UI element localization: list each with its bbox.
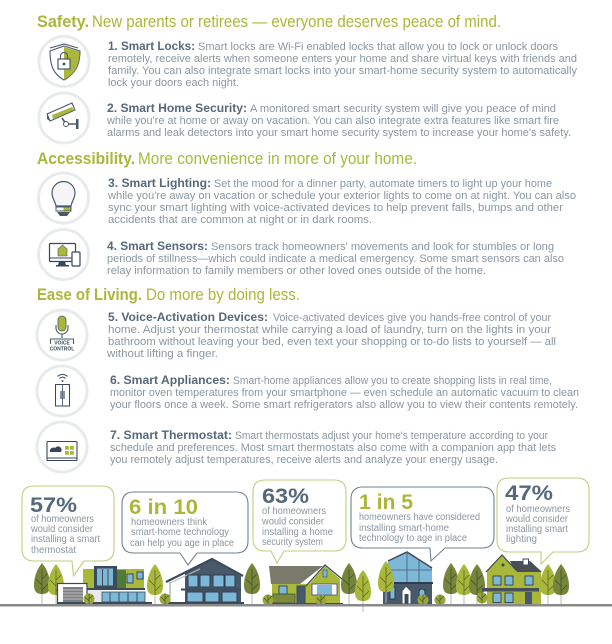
heading: Safety: New parents or retirees — everyone deserves peace of mind.	[92, 12, 501, 31]
text: smart home security	[106, 103, 571, 139]
trees	[34, 563, 569, 612]
heading: Accessibility	[37, 149, 417, 168]
text: smart thermostat: schedule and preferences. Most smart thermostats also come with a companion app that lets	[110, 442, 556, 454]
text: voice-activation devices: bathroom without leaving your bed, even text your shopping or to-do lists to yourself — all	[108, 336, 556, 348]
house 5: olive two-storey	[482, 555, 542, 604]
text: smart sensors: Sensors track homeowners' movements and look for stumbles or long	[211, 241, 554, 253]
text: smart locks: 1. Smart Locks:	[108, 41, 195, 53]
icon: smart sensors devices	[38, 230, 88, 280]
icon: voice control microphone: VOICE	[54, 340, 70, 346]
text: smart home security: alarms and leak detectors into your smart home security system to increase your home's safety.	[107, 127, 571, 139]
icon: smart refrigerator	[37, 366, 87, 416]
text: voice-activation devices: 5. Voice-Activation Devices:	[108, 312, 268, 324]
icon: voice control microphone	[37, 310, 87, 360]
callout: 1 in 5: installing smart-home	[359, 523, 449, 534]
heading: Ease of Living: Ease of Living.	[37, 285, 142, 304]
callout: 47%: 47%	[505, 481, 553, 505]
callout: 63%: 63%	[262, 484, 309, 508]
text: smart thermostat: 7. Smart Thermostat:	[110, 430, 232, 442]
house 3: olive with grey roof	[268, 565, 343, 604]
text: smart lighting: 3. Smart Lighting:	[108, 178, 211, 190]
icon: smart lock shield	[39, 36, 89, 86]
text: smart appliances: monitor oven temperatures from your smartphone — even schedule an automatic vacuum to clean	[110, 387, 579, 399]
heading: Safety: Safety.	[37, 12, 89, 31]
callout: 1 in 5: technology to age in place	[359, 533, 467, 544]
text: smart appliances: your floors once a week. Some smart refrigerators also allow you to view their contents remotely.	[110, 399, 578, 411]
icon: light bulb	[38, 173, 88, 223]
heading: Ease of Living	[37, 285, 300, 304]
callout: 6 in 10: smart-home technology	[131, 527, 229, 538]
tree in front of house 4	[378, 561, 394, 603]
text: smart sensors: periods of stillness—which could indicate a medical emergency. Some smart sensors can also	[107, 253, 564, 265]
text: smart thermostat	[110, 430, 556, 466]
text: smart home security: A monitored smart security system will give you peace of mind	[250, 103, 556, 115]
text: voice-activation devices: home. Adjust your thermostat while carrying a load of laundry, turn on the lights in your	[108, 324, 551, 336]
text: smart locks: remotely, receive alerts when someone enters your home and share virtual keys with friends and	[108, 53, 577, 65]
callout: 6 in 10: can help you age in place	[130, 538, 234, 549]
callout: 47%: would consider	[505, 514, 569, 525]
callout: 63%: security system	[262, 537, 323, 548]
text: voice-activation devices: Voice-activated devices give you hands-free control of your	[273, 312, 551, 324]
text: smart lighting: sync your smart lighting with voice-activated devices to help prevent falls, bumps and other	[108, 202, 563, 214]
callout: 1 in 5: 1 in 5	[359, 490, 413, 514]
text: smart lighting: Set the mood for a dinner party, automate timers to light up your home	[214, 178, 552, 190]
text: voice-activation devices	[106, 312, 556, 360]
callout: 57%: of homeowners	[31, 514, 94, 525]
callout: 47%: of homeowners	[506, 504, 570, 515]
text: voice-activation devices: without lifting a finger.	[106, 348, 218, 360]
text: smart appliances	[110, 375, 579, 411]
callout: 1 in 5	[351, 487, 494, 561]
callout: 47%	[497, 478, 589, 564]
callout: 63%	[253, 480, 346, 563]
text: smart home security: 2. Smart Home Security:	[107, 103, 247, 115]
text: smart lighting: accidents that are common at night or in dark rooms.	[108, 214, 372, 226]
house 2: slate with blue windows	[165, 559, 244, 604]
ground line	[0, 604, 612, 606]
callout: 63%: of homeowners	[262, 506, 326, 517]
callout: 63%: installing a home	[262, 527, 333, 538]
text: smart home security: while you're at home or away on vacation. You can also integrate extra features like smart fire	[106, 115, 559, 127]
callout: 1 in 5: homeowners have considered	[359, 512, 480, 523]
callout: 47%: lighting	[506, 534, 537, 545]
heading: Accessibility: More convenience in more of your home.	[138, 149, 417, 168]
house 4: blue glass	[383, 552, 433, 604]
text: smart locks: Smart locks are Wi-Fi enabled locks that allow you to lock or unlock doors	[198, 41, 558, 53]
text: smart lighting: while you're away on vacation or schedule your exterior lights to come on at night. You can also	[107, 190, 576, 202]
callout: 57%: installing a smart	[31, 534, 100, 545]
text: smart sensors: relay information to family members or other loved ones outside of the home.	[107, 265, 486, 277]
text: smart locks: family. You can also integrate smart locks into your smart-home security system to automatically	[108, 65, 577, 77]
bushes	[84, 592, 488, 606]
callout: 57%: 57%	[30, 493, 77, 517]
callout: 57%	[22, 486, 114, 576]
callout: 47%: installing smart	[506, 524, 568, 535]
callout: 6 in 10	[122, 492, 248, 565]
callout: 57%: thermostat	[31, 545, 76, 556]
text: smart sensors	[107, 241, 564, 277]
icon: security camera	[39, 93, 89, 143]
icon: voice control microphone: CONTROL	[50, 346, 74, 352]
text: smart thermostat: Smart thermostats adjust your home's temperature according to your	[235, 430, 548, 442]
text: smart thermostat: you remotely adjust temperatures, receive alerts and analyze your energy usage.	[110, 454, 498, 466]
text: smart sensors: 4. Smart Sensors:	[107, 241, 208, 253]
text: smart appliances: 6. Smart Appliances:	[110, 375, 230, 387]
heading: Ease of Living: Do more by doing less.	[146, 285, 300, 304]
callout: 57%: would consider	[30, 524, 94, 535]
text: smart lighting	[107, 178, 576, 226]
callout: 6 in 10: homeowners think	[131, 517, 208, 528]
text: smart appliances: Smart-home appliances allow you to create shopping lists in real time,	[233, 375, 552, 387]
house 1: modern	[57, 566, 152, 604]
callout: 63%: would consider	[261, 516, 325, 528]
heading: Accessibility: Accessibility.	[37, 149, 135, 168]
text: smart locks: lock your doors each night.	[108, 77, 239, 89]
icon: smart thermostat	[37, 422, 87, 472]
callout: 6 in 10: 6 in 10	[129, 495, 198, 519]
text: smart locks	[108, 41, 577, 89]
